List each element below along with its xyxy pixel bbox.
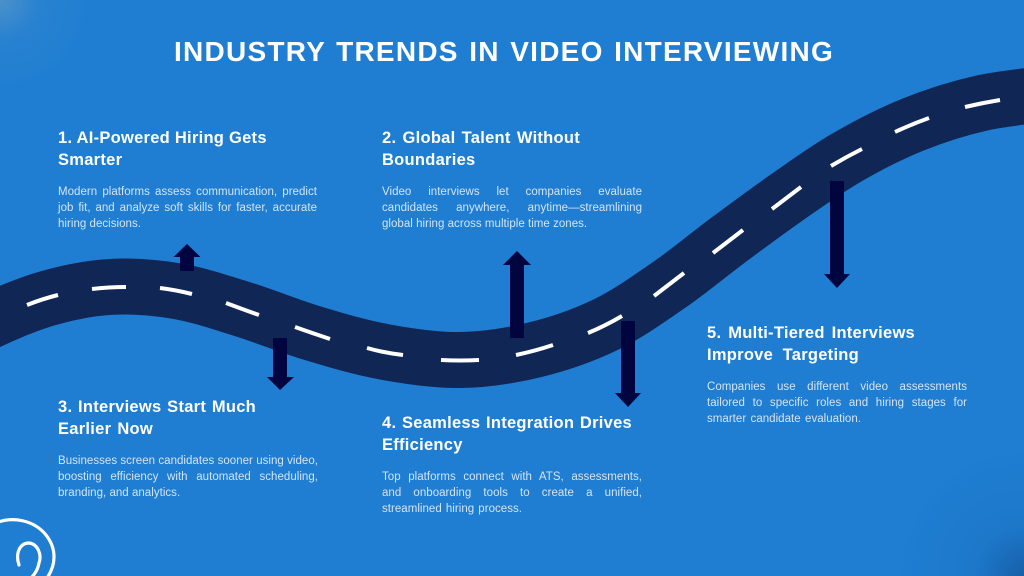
arrow: up to point 1 (174, 244, 200, 271)
text: point 4: Top platforms connect with ATS, assessments, (382, 471, 642, 483)
heading: point 2 (382, 129, 580, 169)
arrow: down to point 5 (824, 181, 850, 288)
text: point 4: and onboarding tools to create a unified, (382, 487, 642, 499)
heading: point 5: Improve Targeting (707, 346, 859, 364)
heading: point 1: Smarter (58, 151, 122, 169)
heading: point 2: Boundaries (382, 151, 475, 169)
heading: point 3: 3. Interviews Start Much (58, 398, 256, 416)
text: point 2: global hiring across multiple time zones. (382, 218, 587, 230)
heading: point 5: 5. Multi-Tiered Interviews (707, 324, 915, 342)
heading: point 2: 2. Global Talent Without (382, 129, 580, 147)
text: point 2: candidates anywhere, anytime—streamlining (382, 202, 642, 214)
heading: point 4: 4. Seamless Integration Drives (382, 414, 632, 432)
text: point 5 (707, 381, 967, 425)
panel: point 4 (382, 414, 642, 515)
text: point 1: hiring decisions. (58, 218, 141, 230)
heading: point 3: Earlier Now (58, 420, 153, 438)
arrow: down to point 4 (615, 321, 641, 407)
panel: point 2 (382, 129, 642, 230)
text: point 5: smarter candidate evaluation. (707, 413, 861, 425)
text: point 5: tailored to specific roles and hiring stages for (707, 397, 967, 409)
text: point 3: branding, and analytics. (58, 487, 180, 499)
panel: point 1 (58, 129, 317, 230)
text: point 5: Companies use different video assessments (707, 381, 967, 393)
heading: point 5 (707, 324, 915, 364)
text: point 1 (58, 186, 317, 230)
heading: point 1 (58, 129, 267, 169)
text: point 3: Businesses screen candidates sooner using video, (58, 455, 318, 467)
panel: point 3 (58, 398, 318, 499)
panel: point 5 (707, 324, 967, 425)
text: point 3: boosting efficiency with automated scheduling, (58, 471, 318, 483)
text: point 1: job fit, and analyze soft skills for faster, accurate (58, 202, 317, 214)
title: INDUSTRY TRENDS IN VIDEO INTERVIEWING (174, 36, 834, 67)
arrow: up to point 2 (503, 251, 531, 338)
decorative spiral icon (0, 520, 54, 576)
text: point 4 (382, 471, 642, 515)
heading: point 3 (58, 398, 256, 438)
text: point 1: Modern platforms assess communication, predict (58, 186, 317, 198)
heading: point 1: 1. AI-Powered Hiring Gets (58, 129, 267, 147)
arrow: down to point 3 (267, 338, 294, 390)
text: point 2 (382, 186, 642, 230)
heading: point 4 (382, 414, 632, 454)
road (0, 92, 1024, 360)
text: point 2: Video interviews let companies evaluate (382, 186, 642, 198)
text: point 4: streamlined hiring process. (382, 503, 522, 515)
road centre dashes (27, 100, 1000, 360)
heading: point 4: Efficiency (382, 436, 463, 454)
text: point 3 (58, 455, 318, 499)
